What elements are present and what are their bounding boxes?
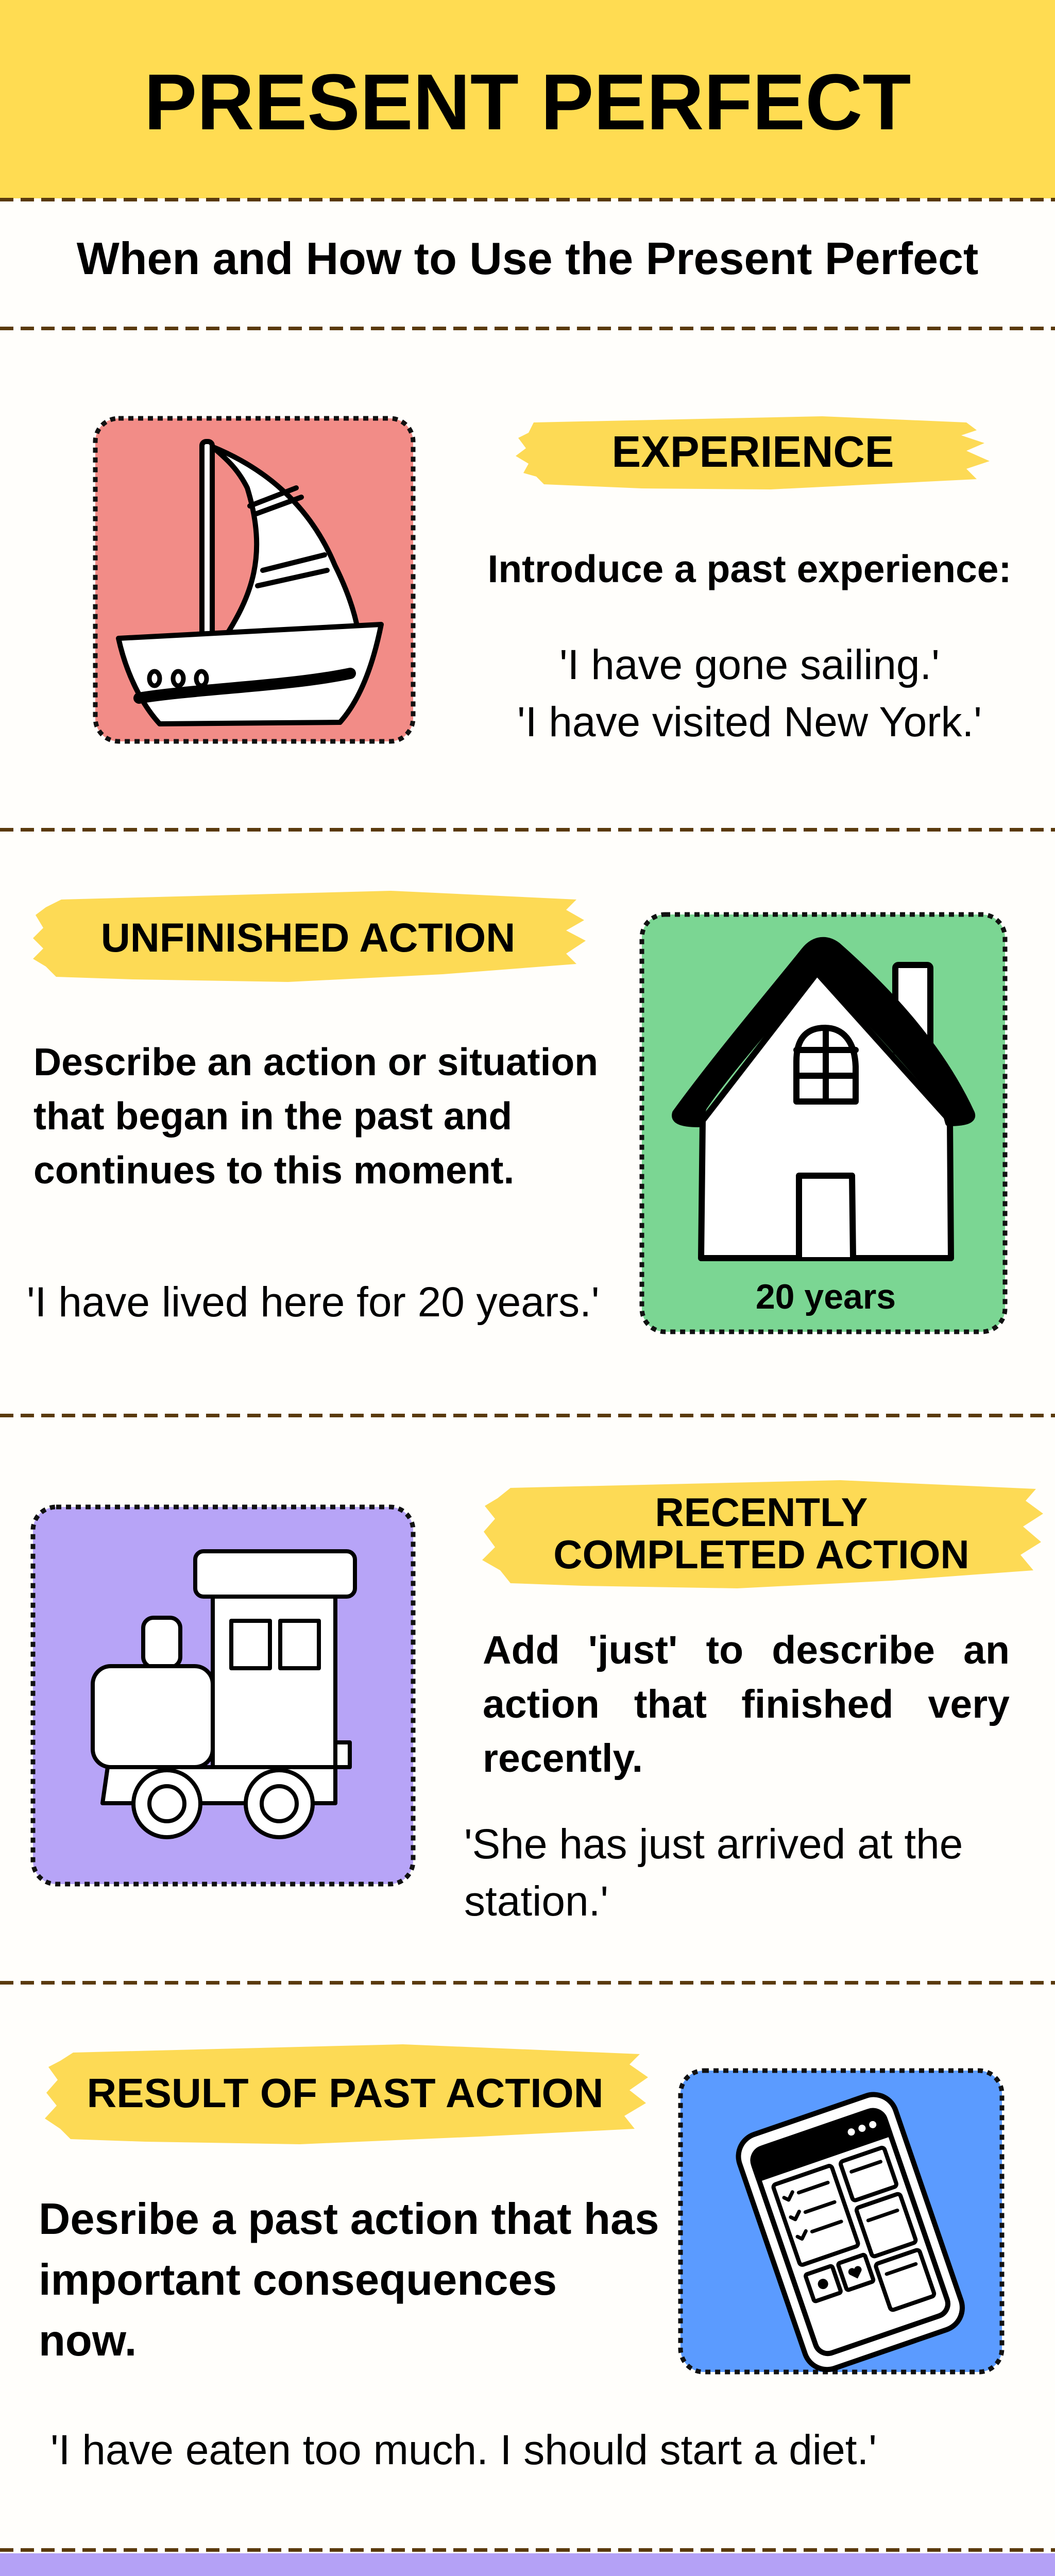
heading: recently completed brush (482, 1480, 1043, 1588)
icon: sailboat (93, 416, 415, 744)
text: recently description: action that finished very (483, 1682, 1010, 1726)
text: unfinished example: 'I have lived here for 20 years.' (27, 1279, 600, 1326)
text: result description: now. (39, 2316, 137, 2365)
text: unfinished description: continues to this moment. (33, 1148, 514, 1192)
heading: recently completed brush: RECENTLY (655, 1489, 868, 1535)
text: result example: 'I have eaten too much. I should start a diet.' (50, 2427, 877, 2473)
heading: result brush (45, 2044, 648, 2144)
icon: train (31, 1504, 415, 1887)
footer band (0, 2553, 1055, 2576)
text: unfinished description (33, 1040, 598, 1192)
heading: unfinished action brush: UNFINISHED ACTION (101, 914, 515, 960)
text: experience description: Introduce a past experience: (487, 547, 1012, 590)
panel: experience (93, 416, 1012, 745)
icon: house (640, 912, 1008, 1334)
text: experience examples: 'I have gone sailing.' (559, 641, 940, 688)
icon: tablet (678, 2068, 1005, 2374)
heading: experience brush: EXPERIENCE (612, 428, 894, 477)
text: experience examples: 'I have visited New York.' (517, 699, 982, 745)
text: recently example: 'She has just arrived at the (464, 1821, 963, 1868)
text: recently description: recently. (483, 1736, 643, 1781)
text: result description (39, 2195, 659, 2365)
text: experience examples (517, 641, 982, 745)
text: recently example (464, 1821, 963, 1925)
title: PRESENT PERFECT (144, 58, 911, 146)
heading: unfinished action brush (33, 891, 586, 982)
panel: result of past action (39, 2044, 1005, 2473)
text: recently description (483, 1628, 1010, 1781)
text: recently example: station.' (464, 1878, 608, 1925)
icon: house: 20 years (756, 1277, 896, 1316)
subtitle: When and How to Use the Present Perfect (77, 233, 978, 284)
heading: recently completed brush: COMPLETED ACTION (553, 1532, 969, 1577)
panel: unfinished action (27, 891, 1008, 1334)
heading: result brush: RESULT OF PAST ACTION (87, 2070, 603, 2116)
panel: recently completed action (31, 1480, 1043, 1925)
heading: experience brush (516, 416, 990, 489)
header band (0, 0, 1055, 198)
text: unfinished description: Describe an action or situation (33, 1040, 598, 1083)
text: result description: important consequences (39, 2256, 557, 2304)
text: unfinished description: that began in the past and (33, 1094, 512, 1138)
text: recently description: Add 'just' to describe an (483, 1628, 1010, 1672)
text: result description: Desribe a past action that has (39, 2195, 659, 2244)
